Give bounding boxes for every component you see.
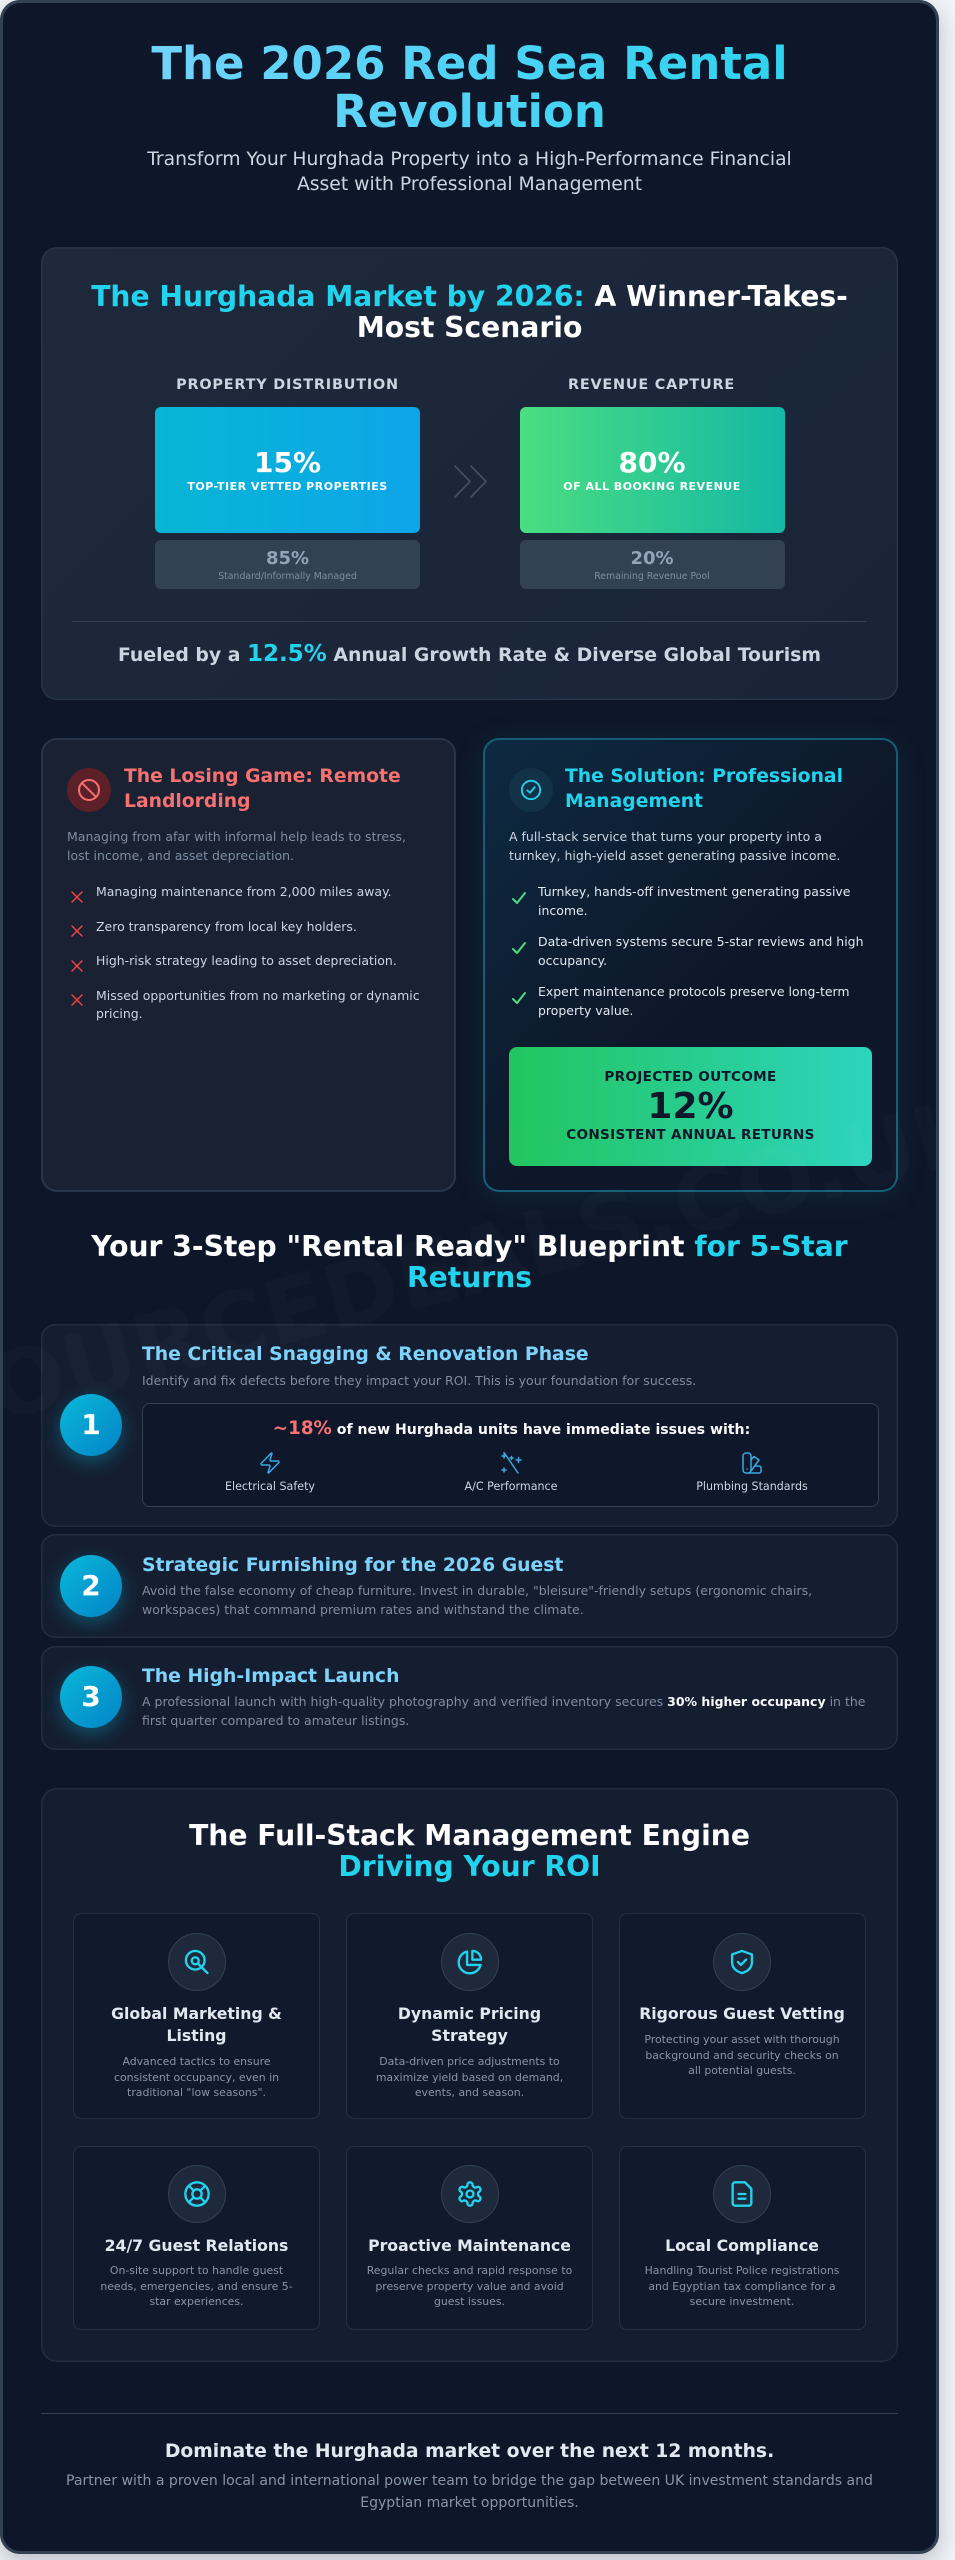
service description: consistent occupancy, even in [114,2071,279,2084]
icon: search target [168,1933,226,1991]
step 2 description [142,1582,812,1616]
point 1: Turnkey, hands-off investment generating passive [538,884,850,899]
point 4 [96,988,420,1021]
losing intro: Managing from afar with informal help leads to stress, [67,829,406,844]
point 2: occupancy. [538,953,607,968]
footer text: Partner with a proven local and international power team to bridge the gap between UK investment standards and [66,2472,873,2488]
step 3 [41,1646,898,1750]
step 2 description: workspaces) that command premium rates and withstand the climate. [142,1602,584,1616]
growth rate statement: Fueled by a 12.5% Annual Growth Rate & Diverse Global Tourism [118,641,821,667]
check icon [512,992,526,1004]
step 1 description: Identify and fix defects before they impact your ROI. This is your foundation for success. [142,1373,696,1388]
check icon [512,942,526,954]
projected outcome box: 12% [647,1086,734,1127]
engine heading: Driving Your ROI [338,1850,601,1882]
service title: Global Marketing & [111,2004,282,2023]
service title: Local Compliance [665,2236,819,2254]
solution heading [565,766,843,812]
x icon [71,994,83,1006]
losing heading [124,766,401,812]
service title: Rigorous Guest Vetting [639,2004,845,2023]
label: property distribution: PROPERTY DISTRIBUTION [176,377,399,393]
service title: Proactive Maintenance [368,2236,571,2254]
point 1: income. [538,903,588,918]
service: global marketing [73,1913,320,2119]
stat: 85 percent: Standard/Informally Managed [218,571,357,582]
point 1: Managing maintenance from 2,000 miles away. [96,884,392,899]
service description: and Egyptian tax compliance for a [648,2280,836,2293]
engine heading [189,1818,750,1882]
service description: Regular checks and rapid response to [367,2264,572,2277]
point 3: High-risk strategy leading to asset depreciation. [96,953,397,968]
blueprint heading [91,1230,848,1294]
service description: Handling Tourist Police registrations [645,2264,839,2277]
service title: 24/7 Guest Relations [105,2236,288,2254]
service description [645,2264,839,2308]
point 4: Missed opportunities from no marketing or dynamic [96,988,420,1002]
stat: 85 percent: 85% [266,548,309,569]
point 1 [538,884,850,918]
losing intro: lost income, and asset depreciation. [67,848,294,863]
step 3 description: A professional launch with high-quality photography and verified inventory secures 30% higher occupancy in the [142,1694,865,1708]
service title [111,2004,282,2045]
icon: ban [67,768,111,812]
stat: 20 percent [520,540,784,589]
label: electrical safety: Electrical Safety [225,1480,315,1493]
footer [66,2441,873,2510]
service description: Data-driven price adjustments to [379,2055,560,2068]
icon: A/C [501,1452,522,1474]
issues statistic: ~18% of new Hurghada units have immediate issues with: [273,1418,750,1439]
title [40,40,899,135]
stat: 80 percent: 80% [618,446,686,479]
check icon [512,892,526,904]
stat: 80 percent: OF ALL BOOKING REVENUE [563,480,741,492]
service description: guest issues. [434,2295,505,2308]
footer text [66,2472,873,2510]
projected outcome box: PROJECTED OUTCOME [604,1069,777,1085]
step 1 title: The Critical Snagging & Renovation Phase [142,1344,589,1365]
service title: Listing [166,2026,226,2045]
solution heading: The Solution: Professional [565,766,843,787]
step 3 number: 3 [81,1680,101,1713]
service description: secure investment. [690,2295,794,2308]
service description [644,2033,840,2077]
service description [367,2264,572,2308]
point 2 [538,934,864,968]
step 3 title: The High-Impact Launch [142,1666,399,1686]
stat: 15 percent: TOP-TIER VETTED PROPERTIES [187,480,388,492]
service title [398,2004,541,2045]
step 3 number [60,1666,122,1728]
point 3 [538,984,850,1018]
market heading: The Hurghada Market by 2026: A Winner-Takes- [91,280,848,312]
service: guest vetting [618,1913,866,2119]
x icon [71,891,83,903]
market heading: Most Scenario [357,310,582,344]
icon: shield check [713,1933,771,1991]
icon: electrical [260,1452,280,1474]
title: Revolution [333,84,606,138]
icon: document [713,2164,771,2222]
losing heading: The Losing Game: Remote [124,766,401,787]
solution intro: turnkey, high-yield asset generating passive income. [509,848,840,863]
panel: market by 2026 [41,247,898,700]
step 2 description: Avoid the false economy of cheap furniture. Invest in durable, "bleisure"-friendly setups (ergonomic chairs, [142,1582,812,1598]
losing heading: Landlording [124,791,251,812]
losing intro [67,829,406,863]
point 2: Data-driven systems secure 5-star reviews and high [538,934,864,949]
service description: preserve property value and avoid [375,2280,564,2293]
list: solution points [512,884,864,1018]
service description: traditional "low seasons". [127,2086,266,2099]
service: dynamic pricing [346,1913,593,2119]
service: compliance [618,2146,866,2330]
stat: 20 percent: Remaining Revenue Pool [594,571,710,582]
stat: 85 percent [155,540,420,589]
projected outcome box [509,1047,872,1166]
icon: gear [440,2164,498,2222]
solution heading: Management [565,791,703,812]
point 4: pricing. [96,1006,143,1021]
blueprint heading: Your 3-Step "Rental Ready" Blueprint for 5-Star [91,1230,848,1262]
service description [100,2264,293,2308]
service description: all potential guests. [688,2064,796,2077]
solution intro [509,829,840,863]
solution intro: A full-stack service that turns your property into a [509,829,822,844]
step 1 [41,1324,898,1527]
service description: maximize yield based on demand, [376,2071,563,2084]
issues box [142,1403,879,1507]
panel: the losing game [41,738,456,1192]
service description [376,2055,563,2099]
panel: management engine [41,1788,898,2362]
service title: Dynamic Pricing [398,2004,541,2023]
point 3: Expert maintenance protocols preserve long-term [538,984,850,999]
label: A/C performance: A/C Performance [465,1480,557,1493]
service description: star experiences. [149,2295,244,2308]
icon: check circle [509,768,553,812]
service description: background and security checks on [645,2049,839,2062]
service description: On-site support to handle guest [110,2264,283,2277]
service description: needs, emergencies, and ensure 5- [100,2280,293,2293]
subtitle: Transform Your Hurghada Property into a High-Performance Financial [147,149,792,170]
step 1 number [60,1394,122,1456]
stat: 15 percent: 15% [254,446,321,479]
market heading [91,280,848,344]
stat: 20 percent: 20% [630,548,674,569]
step 2 number [60,1555,122,1617]
label: revenue capture: REVENUE CAPTURE [568,377,735,393]
label: plumbing standards: Plumbing Standards [696,1480,808,1493]
blueprint heading: Returns [407,1261,532,1294]
title: The 2026 Red Sea Rental [151,37,788,90]
footer text: Egyptian market opportunities. [360,2494,579,2510]
step 1 number: 1 [81,1408,101,1441]
projected outcome box: CONSISTENT ANNUAL RETURNS [566,1127,815,1143]
footer heading: Dominate the Hurghada market over the next 12 months. [165,2441,774,2462]
x icon [71,925,83,937]
panel: the solution [483,738,898,1192]
x icon [71,960,83,972]
point 3: property value. [538,1003,633,1018]
stat: 80 percent [520,407,784,533]
icon: pie chart [440,1933,498,1991]
step 3 description: first quarter compared to amateur listings. [142,1712,409,1728]
header: title and subtitle [147,37,792,195]
step 3 description [142,1694,865,1728]
step 2 title: Strategic Furnishing for the 2026 Guest [142,1554,563,1576]
step 2 [41,1534,898,1638]
service: maintenance [346,2146,593,2330]
point 2: Zero transparency from local key holders. [96,918,357,934]
stat: 15 percent [155,407,420,533]
service description: Protecting your asset with thorough [644,2033,840,2046]
subtitle: Asset with Professional Management [297,174,642,195]
subtitle [147,149,792,195]
service title: Strategy [431,2026,508,2045]
list: losing points [71,884,420,1021]
icon: plumbing [742,1452,762,1474]
icon: double chevron arrow [454,465,487,498]
service: guest relations [73,2146,320,2330]
service description [114,2055,279,2099]
engine heading: The Full-Stack Management Engine [189,1818,750,1852]
service description: Advanced tactics to ensure [122,2055,271,2068]
step 2 number: 2 [81,1569,101,1602]
icon: lifebuoy [168,2164,226,2222]
service description: events, and season. [415,2086,524,2099]
